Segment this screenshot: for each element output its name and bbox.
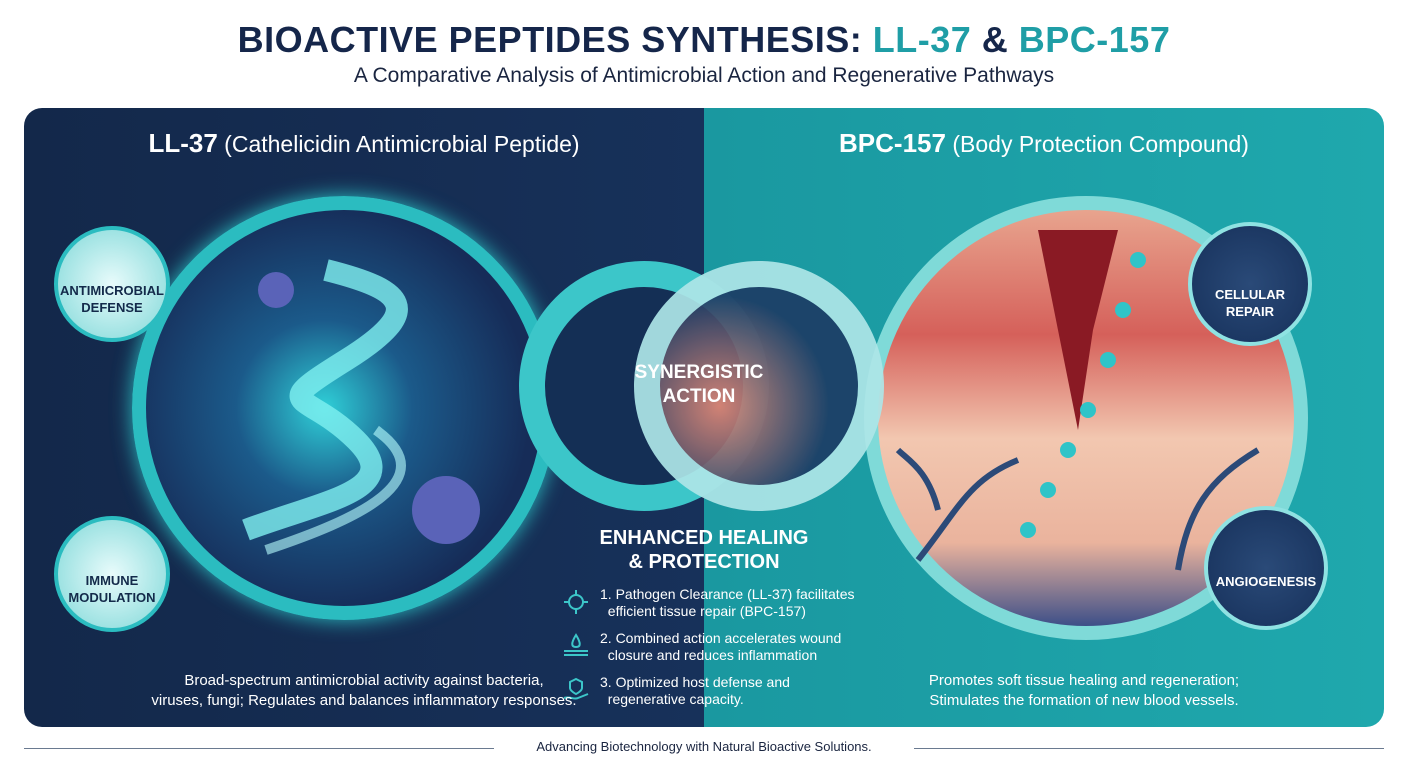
helix — [242, 259, 480, 555]
footer: Advancing Biotechnology with Natural Bioactive Solutions. — [536, 739, 872, 754]
icon: cellular repair — [1188, 222, 1312, 346]
LL-37 description: viruses, fungi; Regulates and balances inflammatory responses. — [151, 692, 577, 709]
icon: angiogenesis: ANGIOGENESIS — [1216, 574, 1316, 589]
icon: cellular repair: CELLULAR — [1215, 287, 1285, 302]
synergistic action label: ACTION — [663, 386, 735, 407]
synergy list: 3. Optimized host defense and — [600, 674, 790, 690]
title: BIOACTIVE PEPTIDES SYNTHESIS: LL-37 & BPC-157 — [238, 19, 1170, 60]
BPC-157 description — [929, 672, 1239, 709]
synergy list: 1. Pathogen Clearance (LL-37) facilitates — [600, 586, 854, 602]
synergistic action label — [635, 362, 763, 407]
subtitle: A Comparative Analysis of Antimicrobial Action and Regenerative Pathways — [354, 64, 1054, 87]
icon: antimicrobial defense: ANTIMICROBIAL — [60, 283, 164, 298]
icon: antimicrobial defense — [54, 226, 170, 342]
icon: angiogenesis — [1204, 506, 1328, 630]
synergy list: regenerative capacity. — [608, 691, 744, 707]
enhanced healing heading: & PROTECTION — [628, 551, 780, 573]
synergy list: 2. Combined action accelerates wound — [600, 630, 841, 646]
synergistic action label: SYNERGISTIC — [635, 362, 763, 383]
LL-37 description — [151, 672, 577, 709]
enhanced healing heading — [600, 527, 808, 573]
enhanced healing heading: ENHANCED HEALING — [600, 527, 808, 549]
synergy list: efficient tissue repair (BPC-157) — [608, 603, 806, 619]
synergy list: closure and reduces inflammation — [608, 647, 817, 663]
icon: antimicrobial defense: DEFENSE — [81, 300, 143, 315]
panel heading: LL-37: LL-37 (Cathelicidin Antimicrobial Peptide) — [148, 128, 580, 158]
main panel — [24, 108, 1384, 727]
icon: cellular repair: REPAIR — [1226, 304, 1274, 319]
icon: immune modulation: MODULATION — [68, 590, 156, 605]
panel heading: BPC-157: BPC-157 (Body Protection Compound) — [839, 128, 1249, 158]
BPC-157 illustration circle — [864, 196, 1308, 640]
icon: immune modulation — [54, 516, 170, 632]
LL-37 illustration circle — [132, 196, 556, 620]
icon: immune modulation: IMMUNE — [86, 573, 138, 588]
synergy rings — [519, 261, 884, 511]
synergy list — [564, 586, 854, 707]
BPC-157 description: Promotes soft tissue healing and regeneration; — [929, 672, 1239, 689]
BPC-157 description: Stimulates the formation of new blood vessels. — [929, 692, 1239, 709]
LL-37 description: Broad-spectrum antimicrobial activity against bacteria, — [184, 672, 544, 689]
